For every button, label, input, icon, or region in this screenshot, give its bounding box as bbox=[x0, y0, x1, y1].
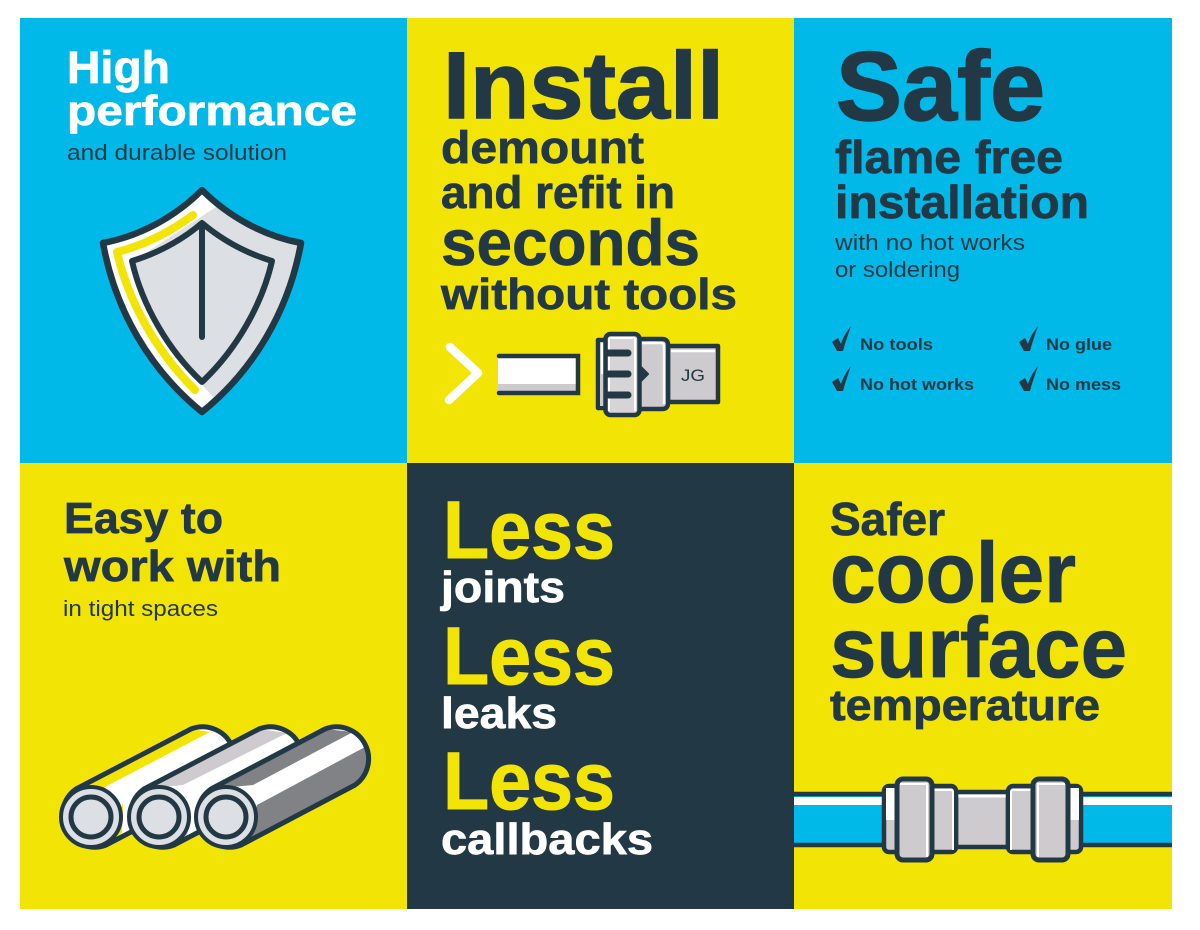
check item: no mess bbox=[1019, 366, 1121, 394]
text: less leaks bbox=[441, 611, 615, 738]
check item: no tools bbox=[832, 326, 933, 354]
heading: install: Install bbox=[443, 33, 724, 139]
text: less callbacks: callbacks bbox=[441, 815, 653, 864]
heading: high performance: performance bbox=[67, 87, 357, 134]
text: less callbacks bbox=[441, 736, 653, 864]
panel: safe bbox=[794, 18, 1172, 463]
panel: less bbox=[407, 463, 794, 909]
icon: chevron arrow bbox=[449, 347, 478, 400]
check item: no glue: No glue bbox=[1046, 335, 1112, 354]
text: flame free installation: flame free bbox=[835, 131, 1063, 183]
heading: high performance bbox=[67, 42, 357, 134]
text: flame free installation: installation bbox=[835, 176, 1089, 228]
check item: no tools: No tools bbox=[860, 335, 933, 354]
check item: no hot works bbox=[832, 366, 974, 394]
text: no hot works or soldering: with no hot works bbox=[834, 230, 1025, 255]
text: no hot works or soldering: or soldering bbox=[835, 257, 960, 282]
icon: pipe with coupling bbox=[794, 779, 1172, 860]
text: less joints: Less bbox=[443, 485, 615, 576]
heading: safer cooler surface temperature: surface bbox=[830, 601, 1127, 696]
check item: no mess: No mess bbox=[1046, 375, 1121, 394]
check item: no hot works: No hot works bbox=[860, 375, 974, 394]
panel: high performance bbox=[20, 18, 407, 463]
text: less leaks: Less bbox=[443, 611, 615, 702]
text: demount and refit in seconds without tools bbox=[440, 122, 737, 319]
heading: safer cooler surface temperature: temperature bbox=[830, 681, 1100, 730]
heading: safe: Safe bbox=[836, 31, 1045, 141]
panel: install bbox=[407, 18, 794, 463]
panel: safer surface bbox=[794, 463, 1172, 909]
text: less joints bbox=[440, 485, 615, 612]
icon: push-fit connector bbox=[598, 334, 718, 415]
text: demount and refit in seconds without tools: demount bbox=[441, 122, 644, 173]
icon: pipe end bbox=[498, 356, 578, 393]
text: demount and refit in seconds without tools: without tools bbox=[440, 270, 737, 319]
text: less leaks: leaks bbox=[441, 689, 557, 738]
icon: three pipes bbox=[61, 727, 369, 847]
icon: shield bbox=[103, 190, 301, 412]
check item: no glue bbox=[1019, 326, 1112, 354]
heading: high performance: High bbox=[67, 42, 170, 93]
heading: easy to work with: Easy to bbox=[64, 494, 223, 543]
pipe 1 bbox=[61, 727, 235, 847]
heading: safer cooler surface temperature bbox=[830, 493, 1127, 730]
text: no hot works or soldering bbox=[834, 230, 1025, 282]
text: flame free installation bbox=[835, 131, 1089, 228]
subheading: in tight spaces: in tight spaces bbox=[63, 596, 218, 621]
logo: JG: JG bbox=[681, 366, 705, 385]
panel: easy to work with bbox=[20, 463, 407, 909]
text: demount and refit in seconds without tools: and refit in bbox=[441, 167, 675, 218]
text: less callbacks: Less bbox=[443, 736, 615, 827]
heading: easy to work with: work with bbox=[63, 542, 281, 591]
checklist bbox=[832, 326, 1121, 394]
pipe 3 bbox=[196, 727, 369, 847]
pipe 2 bbox=[129, 727, 303, 847]
heading: easy to work with bbox=[63, 494, 281, 591]
text: less joints: joints bbox=[440, 563, 565, 612]
text: demount and refit in seconds without tools: seconds bbox=[441, 206, 700, 279]
heading: safer cooler surface temperature: Safer bbox=[830, 493, 945, 545]
heading: safer cooler surface temperature: cooler bbox=[830, 526, 1076, 621]
subheading: durable solution: and durable solution bbox=[67, 140, 287, 165]
